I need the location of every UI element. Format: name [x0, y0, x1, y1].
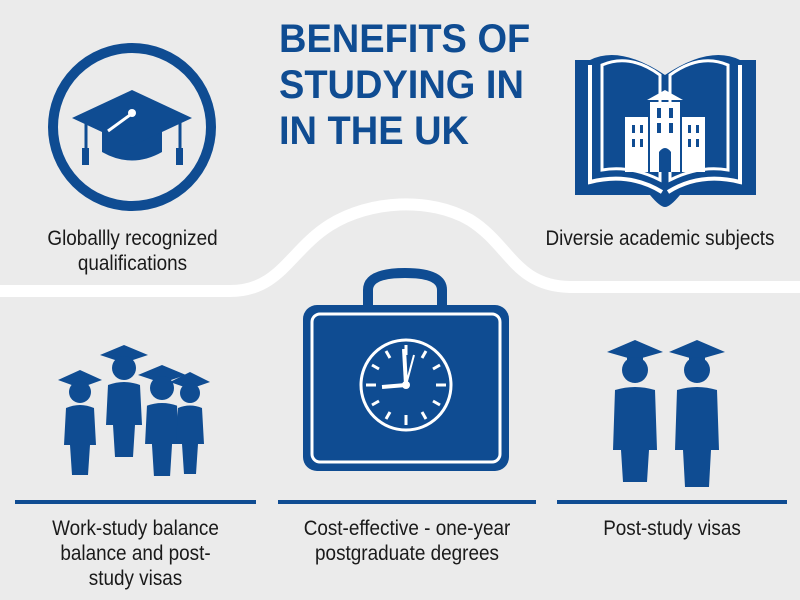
text: globally recognized: qualifications: [78, 252, 187, 275]
title: [279, 17, 530, 153]
text: globally recognized: [47, 227, 218, 275]
text: cost-effective: [304, 517, 510, 565]
icon: book with university: [575, 55, 756, 207]
text: cost-effective: Cost-effective - one-year: [304, 517, 510, 540]
title: IN THE UK: [279, 109, 469, 153]
text: work-study: [52, 517, 219, 590]
text: work-study: balance and post-: [60, 542, 211, 565]
text: post-study visas: Post-study visas: [603, 517, 741, 540]
icon: graduation cap in circle: [48, 43, 216, 211]
text: diverse subjects: Diversie academic subjects: [546, 227, 774, 250]
text: globally recognized: Globallly recognized: [47, 227, 218, 250]
dividers: [15, 500, 256, 504]
icon: two graduates: [607, 340, 725, 487]
text: work-study: Work-study balance: [52, 517, 219, 540]
title: BENEFITS OF: [279, 17, 530, 61]
text: cost-effective: postgraduate degrees: [315, 542, 499, 565]
icon: clock bag: [303, 268, 509, 471]
title: STUDYING IN: [279, 63, 524, 107]
icon: group of graduates: [58, 345, 210, 476]
text: work-study: study visas: [89, 567, 182, 590]
